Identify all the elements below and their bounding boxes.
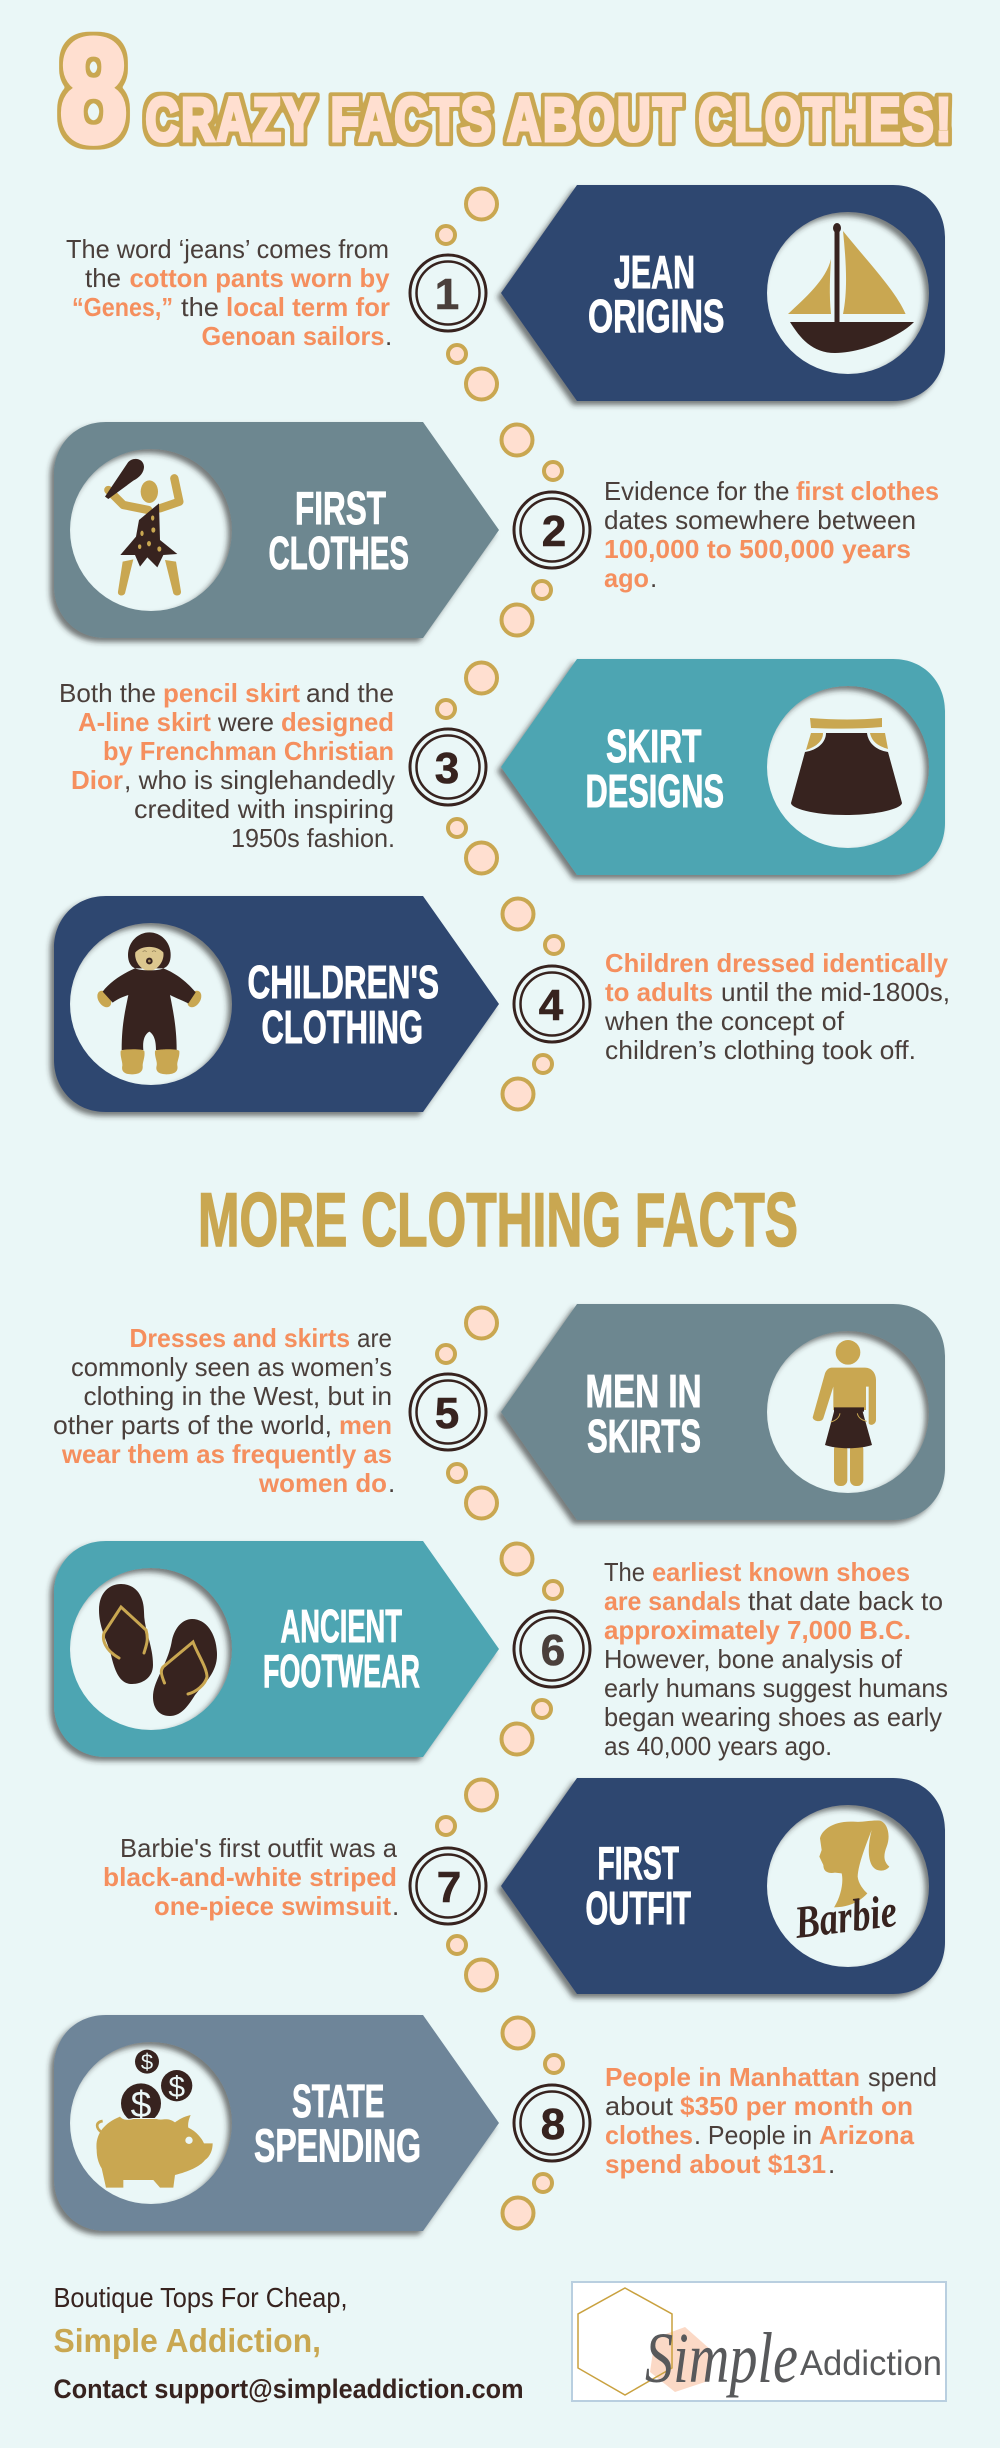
- fact 3 text: , who is singlehandedly: [124, 765, 395, 795]
- number badge 8: 8: [541, 2100, 565, 2149]
- banner: [501, 659, 945, 875]
- banner heading: ORIGINS: [588, 290, 724, 342]
- icon: caveman: [105, 459, 181, 595]
- fact 3 text: and the: [306, 678, 394, 708]
- fact 7 text: [103, 1833, 399, 1921]
- fact 3 text: credited with inspiring: [134, 794, 394, 824]
- title: [60, 9, 954, 172]
- banner heading: [254, 2075, 421, 2172]
- icon: piggy bank: $: [131, 2083, 152, 2125]
- number badge 4: 4: [539, 981, 564, 1030]
- fact 4 text: children’s clothing took off.: [605, 1035, 916, 1065]
- number badge 6: 6: [541, 1626, 565, 1675]
- fact 1 text: cotton pants worn by: [130, 263, 390, 293]
- fact 8 text: .: [828, 2149, 835, 2179]
- banner heading: ANCIENT: [280, 1600, 402, 1652]
- fact 7 text: one-piece swimsuit: [154, 1891, 391, 1921]
- banner heading: SPENDING: [254, 2120, 421, 2172]
- banner heading: CLOTHING: [262, 1001, 423, 1053]
- fact 6: ancient footwear: [54, 1541, 948, 1761]
- banner heading: [586, 1365, 702, 1462]
- fact 6 text: earliest known shoes: [652, 1557, 910, 1587]
- banner heading: JEAN: [614, 246, 695, 298]
- fact 6 text: are sandals: [604, 1586, 741, 1616]
- fact 5 text: wear them as frequently as: [61, 1439, 392, 1469]
- fact 5 text: women do: [258, 1468, 387, 1498]
- number badge 2: 2: [542, 507, 566, 556]
- fact 8 text: about: [605, 2091, 674, 2121]
- connector bubbles: [437, 662, 497, 874]
- fact 3 text: were: [217, 707, 274, 737]
- fact 3 text: designed: [281, 707, 394, 737]
- fact 8 text: clothes: [605, 2120, 693, 2150]
- fact 4 text: Children dressed identically: [605, 948, 949, 978]
- fact 2 text: .: [650, 563, 657, 593]
- title numeral 8: 8: [60, 9, 127, 172]
- banner heading: DESIGNS: [586, 765, 724, 817]
- number badge 3: 3: [435, 744, 459, 793]
- banner heading: STATE: [292, 2075, 384, 2127]
- fact 6 text: early humans suggest humans: [604, 1673, 948, 1703]
- icon: sailboat: [788, 223, 914, 353]
- logo: Simple Addiction: [572, 2282, 946, 2401]
- icon: barbie logo: [791, 1821, 899, 1948]
- connector bubbles: [502, 424, 562, 636]
- icon: barbie logo: Barbie: [791, 1885, 899, 1948]
- icon: piggy bank: $: [141, 2050, 153, 2075]
- icon: child in snowsuit: [94, 932, 204, 1074]
- number badge 6: [514, 1611, 590, 1687]
- connector bubbles: [437, 1308, 497, 1518]
- fact 7 text: Barbie's first outfit was a: [120, 1833, 398, 1863]
- connector bubbles: [502, 1544, 562, 1754]
- fact 1: jean origins: [66, 185, 945, 401]
- banner heading: [248, 956, 439, 1053]
- fact 7 text: black-and-white striped: [103, 1862, 397, 1892]
- icon: man in skirt: [813, 1340, 876, 1486]
- footer tagline: Boutique Tops For Cheap,: [54, 2282, 348, 2313]
- fact 8: state spending: [54, 2015, 937, 2231]
- fact 2 text: first clothes: [796, 476, 939, 506]
- banner: [54, 2015, 499, 2231]
- icon: skirt: [791, 718, 902, 815]
- fact 4: children's clothing: [54, 896, 950, 1112]
- connector bubbles: [502, 2018, 563, 2228]
- footer text: [54, 2282, 524, 2404]
- banner: [54, 896, 499, 1112]
- fact 8 text: People in Manhattan: [605, 2062, 860, 2092]
- number badge 3: [410, 729, 486, 805]
- fact 7 text: .: [392, 1891, 399, 1921]
- footer brand name: Simple Addiction,: [54, 2322, 321, 2359]
- fact 3: skirt designs: [59, 659, 945, 875]
- fact 6 text: The: [604, 1557, 645, 1587]
- banner heading: [268, 482, 409, 579]
- banner heading: MEN IN: [586, 1365, 702, 1417]
- fact 2 text: 100,000 to 500,000 years: [604, 534, 911, 564]
- banner: [501, 185, 945, 401]
- fact 1 text: .: [385, 321, 392, 351]
- footer contact: Contact support@simpleaddiction.com: [54, 2374, 524, 2404]
- banner heading: FIRST: [295, 482, 386, 534]
- number badge 1: [410, 255, 486, 331]
- banner: [501, 1778, 945, 1994]
- fact 3 text: Both the: [59, 678, 156, 708]
- fact 6 text: However, bone analysis of: [604, 1644, 903, 1674]
- fact 3 text: pencil skirt: [163, 678, 300, 708]
- fact 5 text: Dresses and skirts: [130, 1323, 350, 1353]
- fact 5 text: men: [339, 1410, 392, 1440]
- fact 1 text: Genoan sailors: [202, 321, 384, 351]
- banner heading: OUTFIT: [586, 1882, 691, 1934]
- icon: piggy bank: [96, 2050, 213, 2188]
- icon: piggy bank: $: [168, 2071, 185, 2104]
- fact 8 text: $350 per month on: [680, 2091, 913, 2121]
- banner heading: [586, 720, 724, 817]
- fact 3 text: A-line skirt: [78, 707, 211, 737]
- fact 8 text: spend: [868, 2062, 937, 2092]
- banner: [54, 422, 499, 638]
- banner heading: FIRST: [598, 1837, 679, 1889]
- fact 2 text: ago: [604, 563, 649, 593]
- number badge 1: 1: [435, 270, 459, 319]
- banner heading: CLOTHES: [268, 527, 409, 579]
- fact 4 text: [604, 948, 950, 1065]
- fact 4 text: until the mid-1800s,: [721, 977, 950, 1007]
- number badge 7: 7: [437, 1863, 461, 1912]
- connector bubbles: [502, 898, 563, 1110]
- fact 1 text: local term for: [226, 292, 390, 322]
- fact 5 text: are: [357, 1323, 392, 1353]
- banner heading: SKIRTS: [587, 1410, 701, 1462]
- fact 2: first clothes: [54, 422, 939, 638]
- fact 1 text: The word ‘jeans’ comes from: [66, 234, 389, 264]
- banner heading: CHILDREN'S: [248, 956, 439, 1008]
- fact 4 text: when the concept of: [604, 1006, 845, 1036]
- fact 3 text: [59, 678, 395, 853]
- number badge 7: [410, 1848, 486, 1924]
- fact 5 text: other parts of the world,: [53, 1410, 332, 1440]
- banner: [501, 1304, 945, 1520]
- banner heading: [263, 1600, 420, 1697]
- logo: Simple Addiction: Addiction: [800, 2344, 942, 2383]
- number badge 2: [514, 492, 590, 568]
- fact 8 text: Arizona: [819, 2120, 915, 2150]
- number badge 5: [410, 1374, 486, 1450]
- fact 5 text: clothing in the West, but in: [84, 1381, 392, 1411]
- fact 5: men in skirts: [53, 1304, 945, 1520]
- banner heading: FOOTWEAR: [263, 1645, 420, 1697]
- fact 5 text: [53, 1323, 395, 1498]
- fact 5 text: .: [388, 1468, 395, 1498]
- fact 6 text: [604, 1557, 948, 1761]
- fact 8 text: . People in: [694, 2120, 812, 2150]
- banner heading: [586, 1837, 691, 1934]
- fact 2 text: [604, 476, 939, 593]
- fact 3 text: by Frenchman Christian: [103, 736, 394, 766]
- fact 5 text: commonly seen as women’s: [71, 1352, 392, 1382]
- banner heading: SKIRT: [606, 720, 702, 772]
- fact 8 text: spend about $131: [605, 2149, 826, 2179]
- logo: Simple Addiction: Simple: [645, 2318, 798, 2398]
- banner: [54, 1541, 499, 1757]
- fact 6 text: that date back to: [748, 1586, 943, 1616]
- banner heading: [588, 246, 724, 342]
- number badge 8: [514, 2085, 590, 2161]
- number badge 5: 5: [435, 1389, 459, 1438]
- fact 1 text: the: [85, 263, 121, 293]
- fact 6 text: began wearing shoes as early: [604, 1702, 942, 1732]
- fact 4 text: to adults: [605, 977, 713, 1007]
- fact 8 text: [605, 2062, 937, 2179]
- fact 2 text: Evidence for the: [604, 476, 790, 506]
- fact 3 text: 1950s fashion.: [231, 823, 395, 853]
- fact 3 text: Dior: [71, 765, 123, 795]
- fact 1 text: the: [181, 292, 219, 322]
- connector bubbles: [437, 1780, 497, 1990]
- icon: sandals: [99, 1584, 217, 1716]
- connector bubbles: [437, 188, 497, 400]
- fact 1 text: “Genes,”: [72, 292, 173, 322]
- fact 6 text: as 40,000 years ago.: [604, 1731, 832, 1761]
- fact 6 text: approximately 7,000 B.C.: [604, 1615, 911, 1645]
- fact 7: first outfit: [103, 1778, 945, 1994]
- fact 1 text: [66, 234, 392, 351]
- number badge 4: [514, 966, 590, 1042]
- fact 2 text: dates somewhere between: [604, 505, 916, 535]
